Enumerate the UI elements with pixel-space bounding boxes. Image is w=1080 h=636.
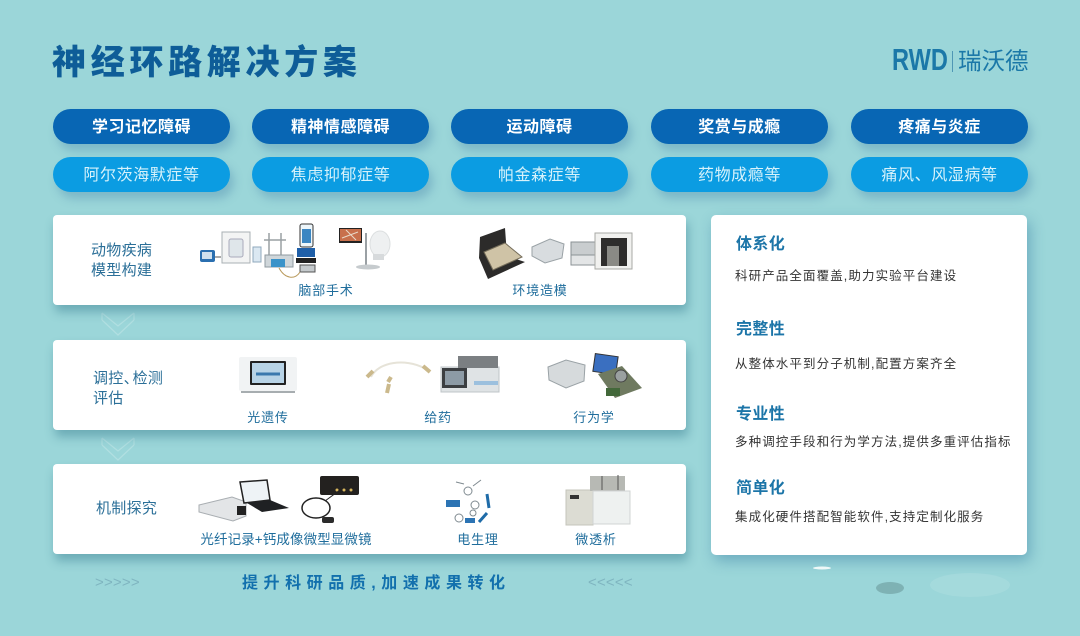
pill: drug addiction [651, 157, 828, 192]
heading: simple: 简单化 [736, 480, 785, 497]
icon: microdialysis [566, 475, 630, 525]
pill: drug addiction: 药物成瘾等 [698, 167, 781, 184]
panel heading: 动物疾病 [91, 242, 152, 259]
pill: reward and addiction: 奖赏与成瘾 [698, 119, 781, 136]
pill: mental and emotional: 精神情感障碍 [291, 119, 390, 136]
text: simple: 集成化硬件搭配智能软件,支持定制化服务 [735, 510, 984, 524]
text: systematic: 科研产品全面覆盖,助力实验平台建设 [735, 269, 957, 283]
pill: learning and memory: 学习记忆障碍 [92, 119, 191, 136]
pill: anxiety: 焦虑抑郁症等 [291, 167, 390, 184]
arrow: chevron down 1 [102, 312, 134, 336]
panel heading: 评估 [93, 390, 124, 407]
logo wordmark: RWD [892, 42, 948, 77]
caption: fibre recording plus calcium imaging: 光纤记录+钙成像微型显微镜 [200, 532, 372, 547]
heading: systematic: 体系化 [736, 236, 785, 253]
icon: drug delivery pump [441, 356, 499, 392]
panel: mechanism study [53, 464, 686, 554]
icon: electrophysiology [446, 480, 489, 523]
slogan: 提升科研品质,加速成果转化 [242, 575, 511, 592]
pill: reward and addiction [651, 109, 828, 144]
caption: microdialysis: 微透析 [575, 532, 617, 547]
pill: gout and rheumatism [851, 157, 1028, 192]
text: completeness: 从整体水平到分子机制,配置方案齐全 [735, 357, 957, 371]
pill: Parkinson [451, 157, 628, 192]
pills: disease categories [53, 109, 1034, 202]
panel: advantages [711, 215, 1027, 555]
pill: pain and inflammation: 疼痛与炎症 [898, 119, 981, 136]
arrow: right chevrons: >>>>> [95, 574, 140, 591]
pill: learning and memory [53, 109, 230, 144]
icon: fibre recording system [199, 480, 289, 521]
heading: completeness: 完整性 [736, 321, 785, 338]
title: 神经环路解决方案 [52, 44, 362, 82]
panel heading [93, 370, 163, 407]
pill: Parkinson: 帕金森症等 [498, 167, 581, 184]
pill: motor [451, 109, 628, 144]
pill: Alzheimer [53, 157, 230, 192]
pill: gout and rheumatism: 痛风、风湿病等 [881, 167, 998, 184]
panel heading: 调控、检测 [93, 370, 163, 387]
pill: motor: 运动障碍 [506, 119, 572, 136]
logo: RWD 瑞沃德 [892, 42, 1028, 77]
text: professional: 多种调控手段和行为学方法,提供多重评估指标 [735, 435, 1012, 449]
icon: environment modelling equipment [479, 228, 632, 279]
caption: optogenetics: 光遗传 [247, 410, 289, 425]
caption: brain surgery: 脑部手术 [298, 283, 354, 298]
heading: professional: 专业性 [736, 406, 785, 423]
caption: environment modelling: 环境造模 [512, 283, 568, 298]
panel: animal disease model [53, 215, 686, 305]
panel heading [91, 242, 152, 279]
arrow: chevron down 2 [102, 438, 134, 460]
decoration: watermark smudge [813, 566, 1010, 597]
arrow: left chevrons: <<<<< [588, 574, 633, 591]
equipment illustrations [200, 224, 632, 279]
panel heading: 机制探究 [96, 500, 157, 517]
pill: Alzheimer: 阿尔茨海默症等 [83, 167, 200, 184]
icon: drug delivery cannula [367, 362, 430, 393]
icon: surgery equipment [200, 224, 316, 277]
caption: behaviour: 行为学 [573, 410, 615, 425]
icon: behaviour equipment [548, 354, 642, 398]
pill: anxiety [252, 157, 429, 192]
logo divider [952, 51, 953, 72]
equipment illustrations [198, 475, 630, 526]
panel heading: 模型构建 [91, 262, 152, 279]
panel: regulation and detection [53, 340, 686, 430]
caption: electrophysiology: 电生理 [457, 532, 499, 547]
equipment illustrations [239, 353, 642, 398]
icon: miniature microscope [302, 476, 359, 523]
icon: optogenetics device [239, 357, 297, 393]
pill: mental and emotional [252, 109, 429, 144]
icon: surgery microscope and monitor [339, 228, 390, 270]
pill: pain and inflammation [851, 109, 1028, 144]
logo Chinese name: 瑞沃德 [958, 48, 1028, 74]
caption: drug delivery: 给药 [424, 410, 452, 425]
